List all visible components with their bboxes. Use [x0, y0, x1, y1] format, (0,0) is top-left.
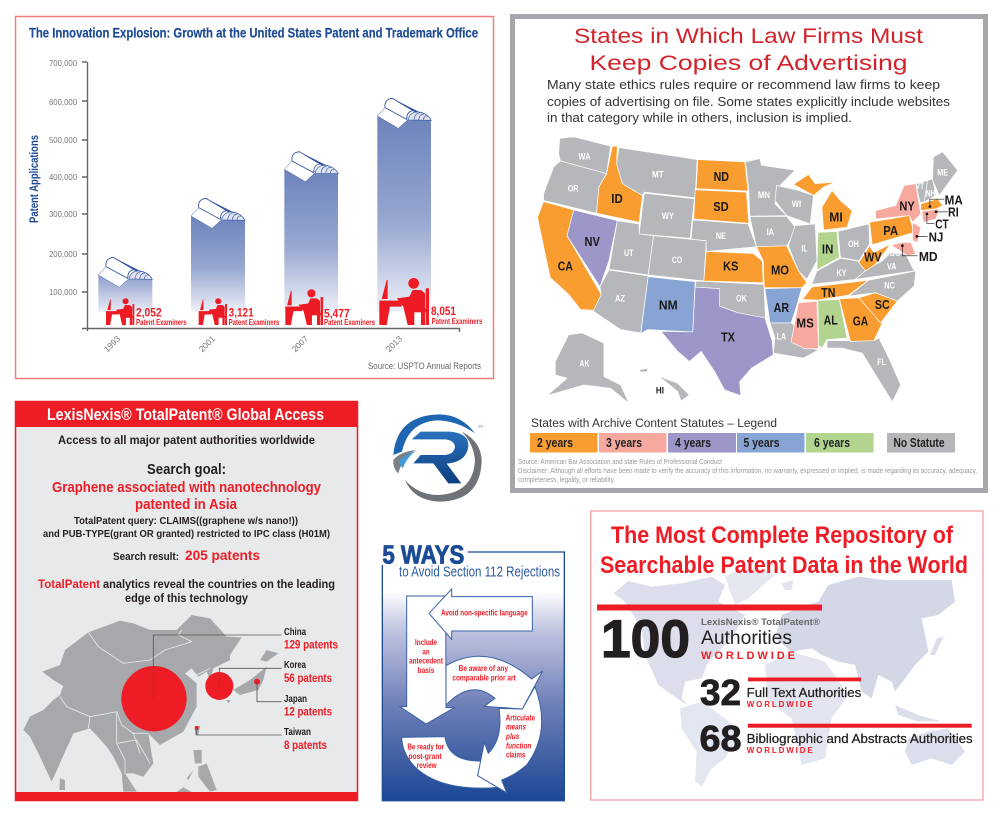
stat: 32 full text: 32: [700, 672, 741, 713]
arrow text: be aware: comparable prior art: [452, 672, 516, 682]
analytics text: analytics reveal the countries on the leading: [103, 577, 335, 591]
bar 2001: 3,121: [229, 306, 254, 320]
map title: [574, 25, 923, 75]
state labels: NY: [899, 199, 915, 214]
state labels: TX: [721, 330, 735, 345]
heading: [600, 522, 968, 579]
y axis tick labels: 600,000: [49, 98, 78, 107]
state labels: [558, 152, 963, 395]
bar 1993: 2,052: [136, 306, 162, 320]
country borders: [60, 630, 210, 773]
country labels: Taiwan: [284, 727, 311, 738]
stat: 68 bibliographic: Bibliographic and Abstracts Authorities: [747, 732, 973, 746]
stat: 100 authorities: Authorities: [701, 628, 792, 649]
panel: patent application growth chart: [16, 16, 494, 378]
state labels: MD: [919, 249, 938, 264]
arrow text: be aware: Be aware of any: [459, 663, 508, 673]
source and disclaimer: Source: American Bar Association and state Rules of Professional Conduct: [518, 457, 723, 466]
state labels: VA: [887, 262, 897, 272]
state labels: MT: [652, 170, 664, 180]
state labels: OK: [736, 293, 747, 303]
state labels: AR: [774, 300, 789, 315]
leader lines: [153, 635, 282, 735]
header text: LexisNexis® TotalPatent® Global Access: [47, 405, 324, 424]
x axis year labels: 2001: [197, 333, 217, 354]
search result: Search result:: [113, 551, 179, 563]
state labels: GA: [853, 313, 868, 328]
bar 2013: 8,051: [431, 304, 456, 318]
state labels: SC: [875, 297, 890, 312]
country labels: 12 patents: [284, 706, 332, 718]
source and disclaimer: completeness, legality, or reliability.: [518, 475, 615, 484]
state labels: NJ: [929, 229, 943, 244]
gradient background: [382, 578, 564, 801]
stat: 68 bibliographic: [700, 718, 973, 759]
arrow: articulate: [478, 687, 542, 793]
header band: [15, 401, 358, 427]
world map background: [613, 568, 965, 787]
x axis year labels: 2007: [290, 333, 310, 354]
chart axes: [82, 62, 460, 332]
analytics text: edge of this technology: [125, 591, 248, 605]
query text: [43, 515, 330, 540]
chart source: Source: USPTO Annual Reports: [368, 361, 481, 371]
stat: 32 full text: Full Text Authorities: [747, 686, 861, 700]
arrow text: be ready: review: [417, 760, 437, 770]
state labels: NH: [926, 188, 935, 198]
Japan bubble: [254, 679, 260, 685]
bar 2007: [284, 152, 375, 327]
x axis year labels: 1993: [102, 333, 122, 354]
arrow text: be ready: [407, 742, 445, 770]
state labels: SD: [713, 199, 729, 214]
y axis tick labels: 400,000: [49, 173, 78, 182]
arrow: avoid non-specific language: [429, 589, 532, 639]
Korea bubble: [205, 672, 233, 700]
analytics text: [38, 577, 335, 605]
legend: 5 years: [744, 435, 780, 450]
y axis tick labels: 500,000: [49, 136, 78, 145]
heading: The Most Complete Repository of: [611, 522, 954, 549]
state labels: MS: [796, 315, 814, 330]
legend: [530, 433, 955, 452]
land masses: [23, 615, 278, 792]
arrow text: include: Include: [415, 637, 437, 647]
arrow text: include: [409, 637, 443, 675]
country labels: 129 patents: [284, 640, 338, 652]
state labels: ID: [611, 191, 623, 206]
Taiwan bubble: [195, 726, 199, 730]
y axis tick labels: [49, 59, 78, 297]
arrow text: articulate: means: [506, 722, 526, 732]
search goal: [52, 461, 322, 513]
arrow: be ready for post-grant review: [402, 737, 498, 788]
x axis year labels: [102, 333, 404, 354]
state labels: NC: [884, 280, 896, 290]
state labels: UT: [624, 248, 634, 258]
country labels: Japan: [284, 694, 307, 705]
search goal: Graphene associated with nanotechnology: [52, 479, 322, 496]
map title: Keep Copies of Advertising: [590, 52, 908, 75]
state labels: DC: [890, 248, 901, 258]
country labels: [284, 627, 338, 752]
country labels: 56 patents: [284, 673, 332, 685]
state labels: AZ: [615, 293, 626, 303]
logo swoosh highlight: [398, 451, 416, 468]
logo blue arc: [393, 414, 475, 455]
arrow text: articulate: [505, 712, 535, 759]
stat: 32 full text: [700, 672, 861, 713]
icon: R logo: [393, 414, 483, 502]
legend: 4 years: [675, 435, 711, 450]
x axis year labels: 2013: [384, 333, 404, 354]
state labels: PA: [883, 223, 898, 238]
state labels: MO: [771, 262, 789, 277]
panel outline: [382, 552, 564, 801]
state labels: WA: [578, 152, 591, 162]
China bubble: [121, 666, 187, 731]
chart title: The Innovation Explosion: Growth at the United States Patent and Trademark Office: [29, 24, 478, 40]
bar 2007: 5,477: [324, 306, 350, 320]
source and disclaimer: [518, 457, 977, 484]
state labels: VT: [915, 181, 925, 191]
state labels: OR: [568, 183, 579, 193]
query text: TotalPatent query: CLAIMS((graphene w/s nano!)): [74, 515, 298, 527]
arrow text: include: an: [422, 646, 430, 656]
state labels: OH: [848, 239, 859, 249]
stat: 68 bibliographic: WORLDWIDE: [747, 746, 813, 755]
y axis label: Patent Applications: [27, 135, 41, 223]
state labels: WY: [662, 211, 674, 221]
state labels: IA: [767, 227, 775, 237]
map intro text: in that category while in others, inclusion is implied.: [547, 111, 852, 125]
state labels: IN: [822, 241, 833, 256]
state labels: ME: [937, 167, 948, 177]
state labels: AK: [579, 359, 590, 369]
y axis tick labels: 300,000: [49, 210, 78, 219]
state labels: MI: [829, 210, 843, 225]
legend: 2 years: [537, 435, 573, 450]
state labels: KY: [836, 268, 847, 278]
Asia map with patent bubbles: [23, 615, 282, 792]
subheading: to Avoid Section 112 Rejections: [399, 565, 560, 581]
map intro text: Many state ethics rules require or recommend law firms to keep: [547, 78, 940, 92]
arrow text: be ready: Be ready for: [407, 742, 445, 752]
heading: Searchable Patent Data in the World: [600, 552, 968, 579]
state labels: HI: [656, 385, 664, 395]
subhead: Access to all major patent authorities worldwide: [58, 433, 315, 447]
state labels: DE: [913, 242, 922, 252]
legend: 3 years: [606, 435, 642, 450]
stat: 68 bibliographic: 68: [700, 718, 742, 759]
panel: 5 ways: [382, 539, 564, 801]
bar 2001: Patent Examiners: [229, 317, 280, 327]
arrow text: include: antecedent: [409, 656, 443, 666]
state labels: CO: [672, 255, 682, 265]
bar 2001: [191, 198, 280, 327]
legend: 6 years: [814, 435, 850, 450]
arrow: include an antecedent basis: [400, 596, 454, 724]
y axis tick labels: 700,000: [49, 59, 78, 68]
logo letter R: [412, 432, 468, 483]
US map: [538, 137, 963, 403]
arrow text: be aware: [452, 663, 516, 682]
stat: 100 authorities: WORLDWIDE: [701, 650, 795, 662]
stat: 100 authorities: [597, 604, 822, 669]
state labels: NE: [716, 231, 726, 241]
search goal: patented in Asia: [135, 496, 238, 513]
y axis tick labels: 200,000: [49, 250, 78, 259]
panel: TotalPatent global access: [15, 401, 358, 801]
arrow: be aware: [446, 656, 543, 709]
legend title: States with Archive Content Statutes – Legend: [531, 418, 777, 430]
arrow text: be ready: post-grant: [408, 751, 442, 761]
trademark: SM: [478, 424, 483, 428]
bar 1993: Patent Examiners: [136, 317, 187, 327]
stat: 32 full text: WORLDWIDE: [747, 700, 813, 709]
country labels: Korea: [284, 660, 306, 671]
logo swoosh: [393, 450, 416, 473]
footer band: [15, 792, 358, 801]
state shapes: [538, 137, 958, 403]
bar 1993: [98, 257, 187, 327]
state labels: WV: [864, 250, 882, 265]
state labels: FL: [877, 357, 887, 367]
state labels: NM: [659, 298, 678, 313]
map intro text: copies of advertising on file. Some states explicitly include websites: [547, 95, 950, 109]
bar 2013: [377, 98, 483, 326]
bars with document tops and examiner icons: [98, 98, 483, 327]
country labels: 8 patents: [284, 740, 327, 752]
state labels: CA: [558, 259, 573, 274]
arrow text: articulate: function: [506, 740, 531, 750]
state labels: RI: [948, 205, 959, 220]
state labels: MN: [758, 190, 770, 200]
state labels: KS: [723, 259, 738, 274]
state labels: WI: [792, 199, 801, 209]
state labels: CT: [935, 217, 949, 232]
state labels: AL: [824, 313, 838, 328]
analytics text: TotalPatent: [38, 577, 100, 591]
state labels: MA: [945, 193, 963, 208]
bar 2007: Patent Examiners: [324, 317, 375, 327]
state labels: IL: [801, 243, 808, 253]
panel: state advertising statutes map: [512, 16, 986, 490]
country labels: China: [284, 627, 306, 638]
map intro text: [547, 78, 950, 125]
query text: and PUB-TYPE(grant OR granted) restricted to IPC class (H01M): [43, 528, 330, 540]
state labels: ND: [714, 169, 729, 184]
arrow text: articulate: Articulate: [506, 712, 535, 722]
search goal: Search goal:: [147, 461, 226, 478]
stat: 100 authorities: LexisNexis® TotalPatent®: [701, 617, 820, 628]
arrow text: articulate: plus: [505, 731, 520, 741]
stat: 100 authorities: 100: [601, 610, 690, 669]
y axis tick labels: 100,000: [49, 288, 78, 297]
panel: most complete repository: [591, 511, 983, 800]
search result: [113, 547, 260, 563]
state labels: TN: [821, 285, 835, 300]
state labels: NV: [584, 234, 600, 249]
small state leader lines: [901, 199, 948, 256]
arrow text: avoid: Avoid non-specific language: [441, 607, 528, 617]
legend: No Statute: [894, 435, 944, 450]
arrow text: include: basis: [418, 665, 435, 675]
state labels: LA: [777, 331, 787, 341]
bar 2013: Patent Examiners: [432, 316, 483, 326]
search result: 205 patents: [185, 547, 260, 563]
arrow text: articulate: claims: [506, 749, 526, 759]
heading: 5 WAYS: [382, 539, 464, 569]
map title: States in Which Law Firms Must: [574, 25, 923, 48]
logo gray arc: [405, 432, 482, 502]
